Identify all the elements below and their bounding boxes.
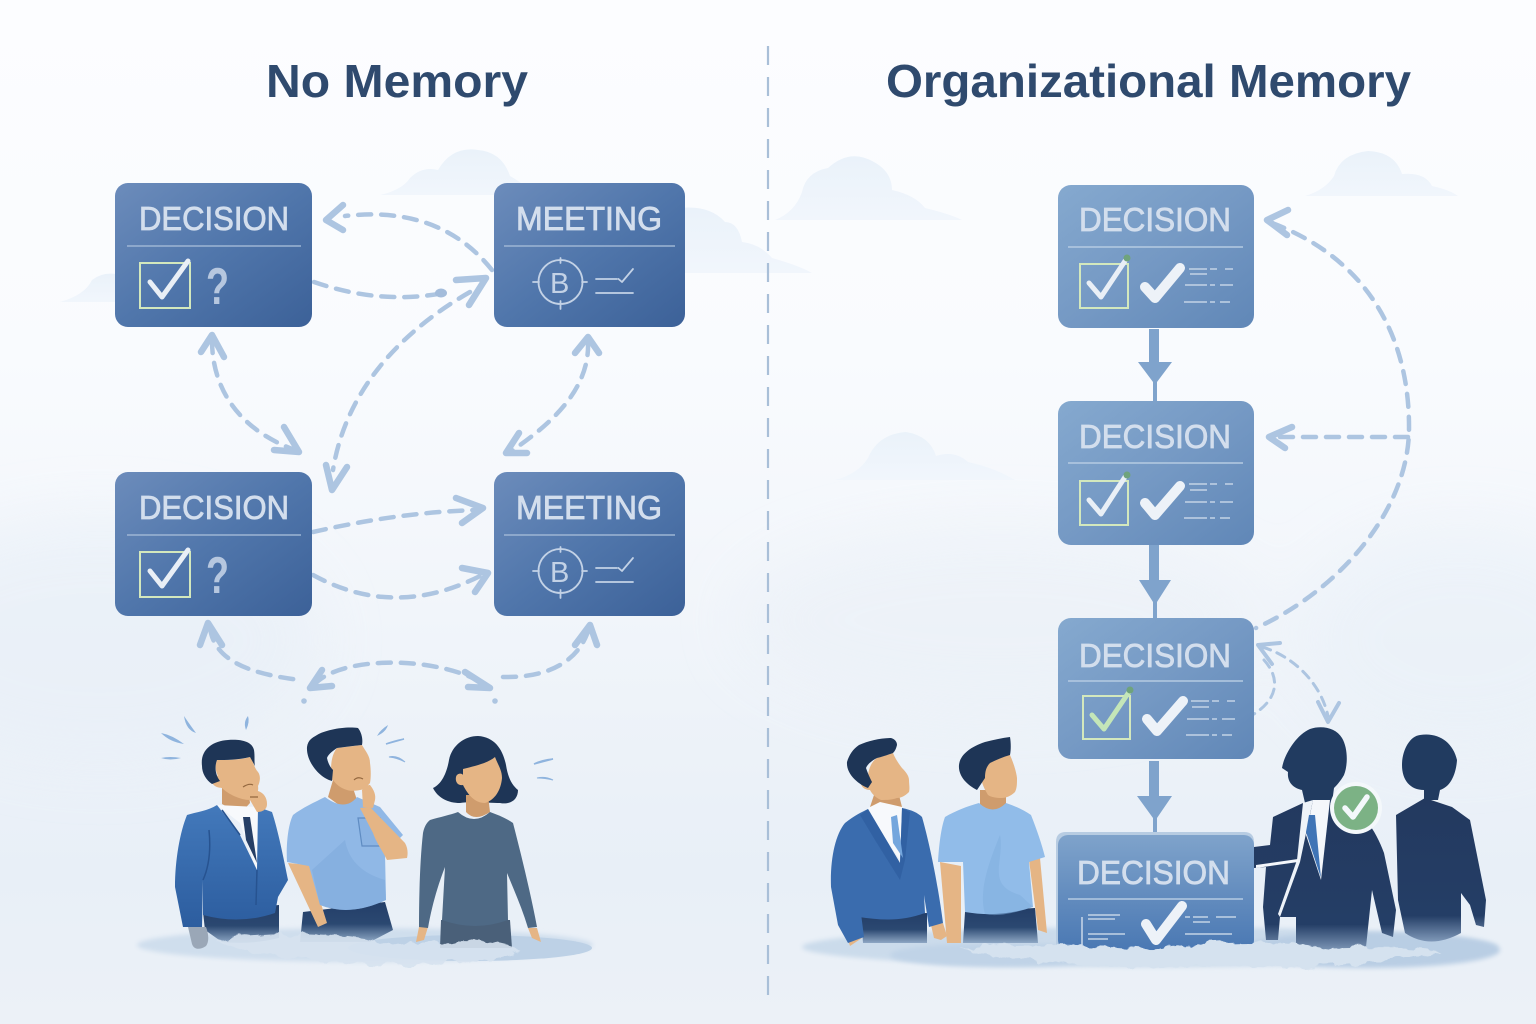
card: decision bottom left <box>115 472 312 616</box>
card: decision top left <box>115 183 312 327</box>
person: dark silhouette with badge <box>1254 727 1396 951</box>
arrow: down 1 <box>1138 329 1172 401</box>
card: meeting top right: B <box>550 268 569 300</box>
card: decision 1 <box>1058 185 1254 328</box>
card: decision 1: DECISION <box>1079 201 1231 238</box>
mist pool: left <box>137 928 593 962</box>
mist foreground: right <box>960 942 1440 968</box>
card: meeting top right: MEETING <box>516 200 662 237</box>
centre divider <box>767 46 769 995</box>
person: suit thinking <box>175 740 288 949</box>
card: meeting bottom right: MEETING <box>516 489 662 526</box>
card: meeting bottom right <box>494 472 685 616</box>
person: dark silhouette <box>1396 734 1486 942</box>
background mist <box>0 520 1536 760</box>
person: t-shirt thinking <box>287 727 408 942</box>
title: no memory: No Memory <box>266 55 528 107</box>
arrow: down 2 <box>1139 545 1171 618</box>
arrow: down 3 <box>1137 761 1172 832</box>
person: woman <box>416 736 541 948</box>
card: decision top left: ? <box>206 258 229 316</box>
card: decision 3: DECISION <box>1079 637 1231 674</box>
card: decision top left: DECISION <box>139 200 289 237</box>
person: t-shirt <box>938 737 1047 943</box>
mist pool: right <box>802 927 1500 968</box>
person: suit <box>831 738 947 946</box>
panel: organizational memory flow <box>1058 185 1409 832</box>
clouds <box>60 149 1458 480</box>
card: decision bottom left: DECISION <box>139 489 289 526</box>
icon: green check badge <box>1330 782 1382 834</box>
card: decision 4 <box>1056 832 1254 950</box>
card: decision 2: DECISION <box>1079 418 1231 455</box>
people: confused group <box>161 716 553 949</box>
card: meeting top right <box>494 183 685 327</box>
panel: no memory flow <box>115 183 685 704</box>
card: decision bottom left: ? <box>206 547 229 605</box>
icon: worry marks <box>161 716 553 780</box>
card: decision 3 <box>1058 618 1254 759</box>
card: meeting bottom right: B <box>550 557 569 589</box>
tangled arrows <box>200 205 599 704</box>
mist foreground: left <box>215 934 520 965</box>
people: informed group <box>831 727 1486 951</box>
title: organizational memory: Organizational Memory <box>886 55 1411 107</box>
card: decision 4: DECISION <box>1077 854 1230 891</box>
card: decision 2 <box>1058 401 1254 545</box>
feedback arrows <box>1254 210 1409 722</box>
